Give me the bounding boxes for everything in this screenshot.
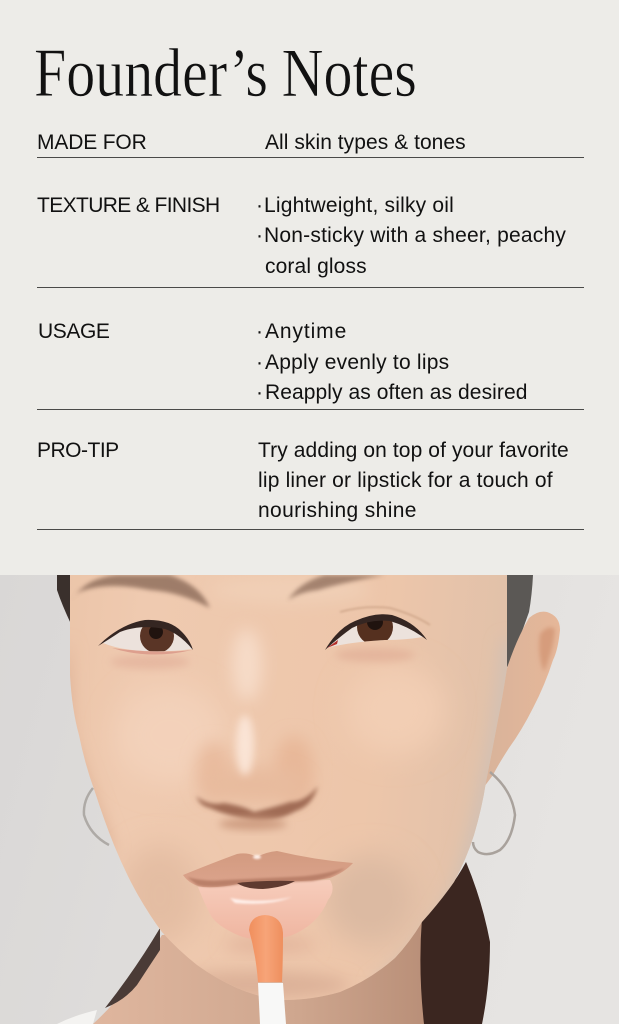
row: usage: Reapply as often as desired [265, 381, 528, 404]
brows [72, 575, 385, 608]
row: usage: · [256, 351, 263, 374]
row: usage [38, 320, 528, 404]
row: texture and finish: Lightweight, silky oil [264, 194, 454, 217]
face [70, 575, 507, 1000]
earring: left hoop [84, 788, 109, 845]
row: usage: Apply evenly to lips [265, 351, 449, 374]
row: usage: · [256, 320, 263, 343]
lip applicator wand [249, 915, 286, 1024]
row: texture and finish: coral gloss [265, 255, 367, 278]
row: texture and finish: Non-sticky with a sheer, peachy [264, 224, 566, 247]
row: pro-tip [37, 439, 569, 522]
row: made for [37, 131, 466, 154]
row: pro-tip: nourishing shine [258, 499, 417, 522]
row: texture and finish: · [256, 224, 263, 247]
neck [93, 910, 426, 1024]
eye: left [98, 619, 193, 669]
row: made for: All skin types & tones [265, 131, 466, 154]
earring: right hoop [473, 772, 515, 854]
shirt [57, 1010, 97, 1024]
row: texture and finish: · [256, 194, 263, 217]
background [0, 575, 619, 1024]
row: pro-tip: PRO-TIP [37, 439, 119, 462]
row: texture and finish [37, 194, 566, 278]
row: usage: · [256, 381, 263, 404]
row: pro-tip: Try adding on top of your favorite [258, 439, 569, 462]
lips [183, 851, 353, 953]
hair [57, 575, 533, 1024]
row: texture and finish: TEXTURE & FINISH [37, 194, 220, 217]
eye: right [325, 607, 430, 662]
ear [483, 612, 560, 787]
row: usage: Anytime [265, 320, 347, 343]
row: pro-tip: lip liner or lipstick for a touch of [258, 469, 553, 492]
row: usage: USAGE [38, 320, 110, 343]
row: made for: MADE FOR [37, 131, 147, 154]
nose [196, 629, 318, 830]
photo: woman applying lip oil [0, 575, 619, 1024]
title: Founder’s Notes [34, 35, 417, 111]
